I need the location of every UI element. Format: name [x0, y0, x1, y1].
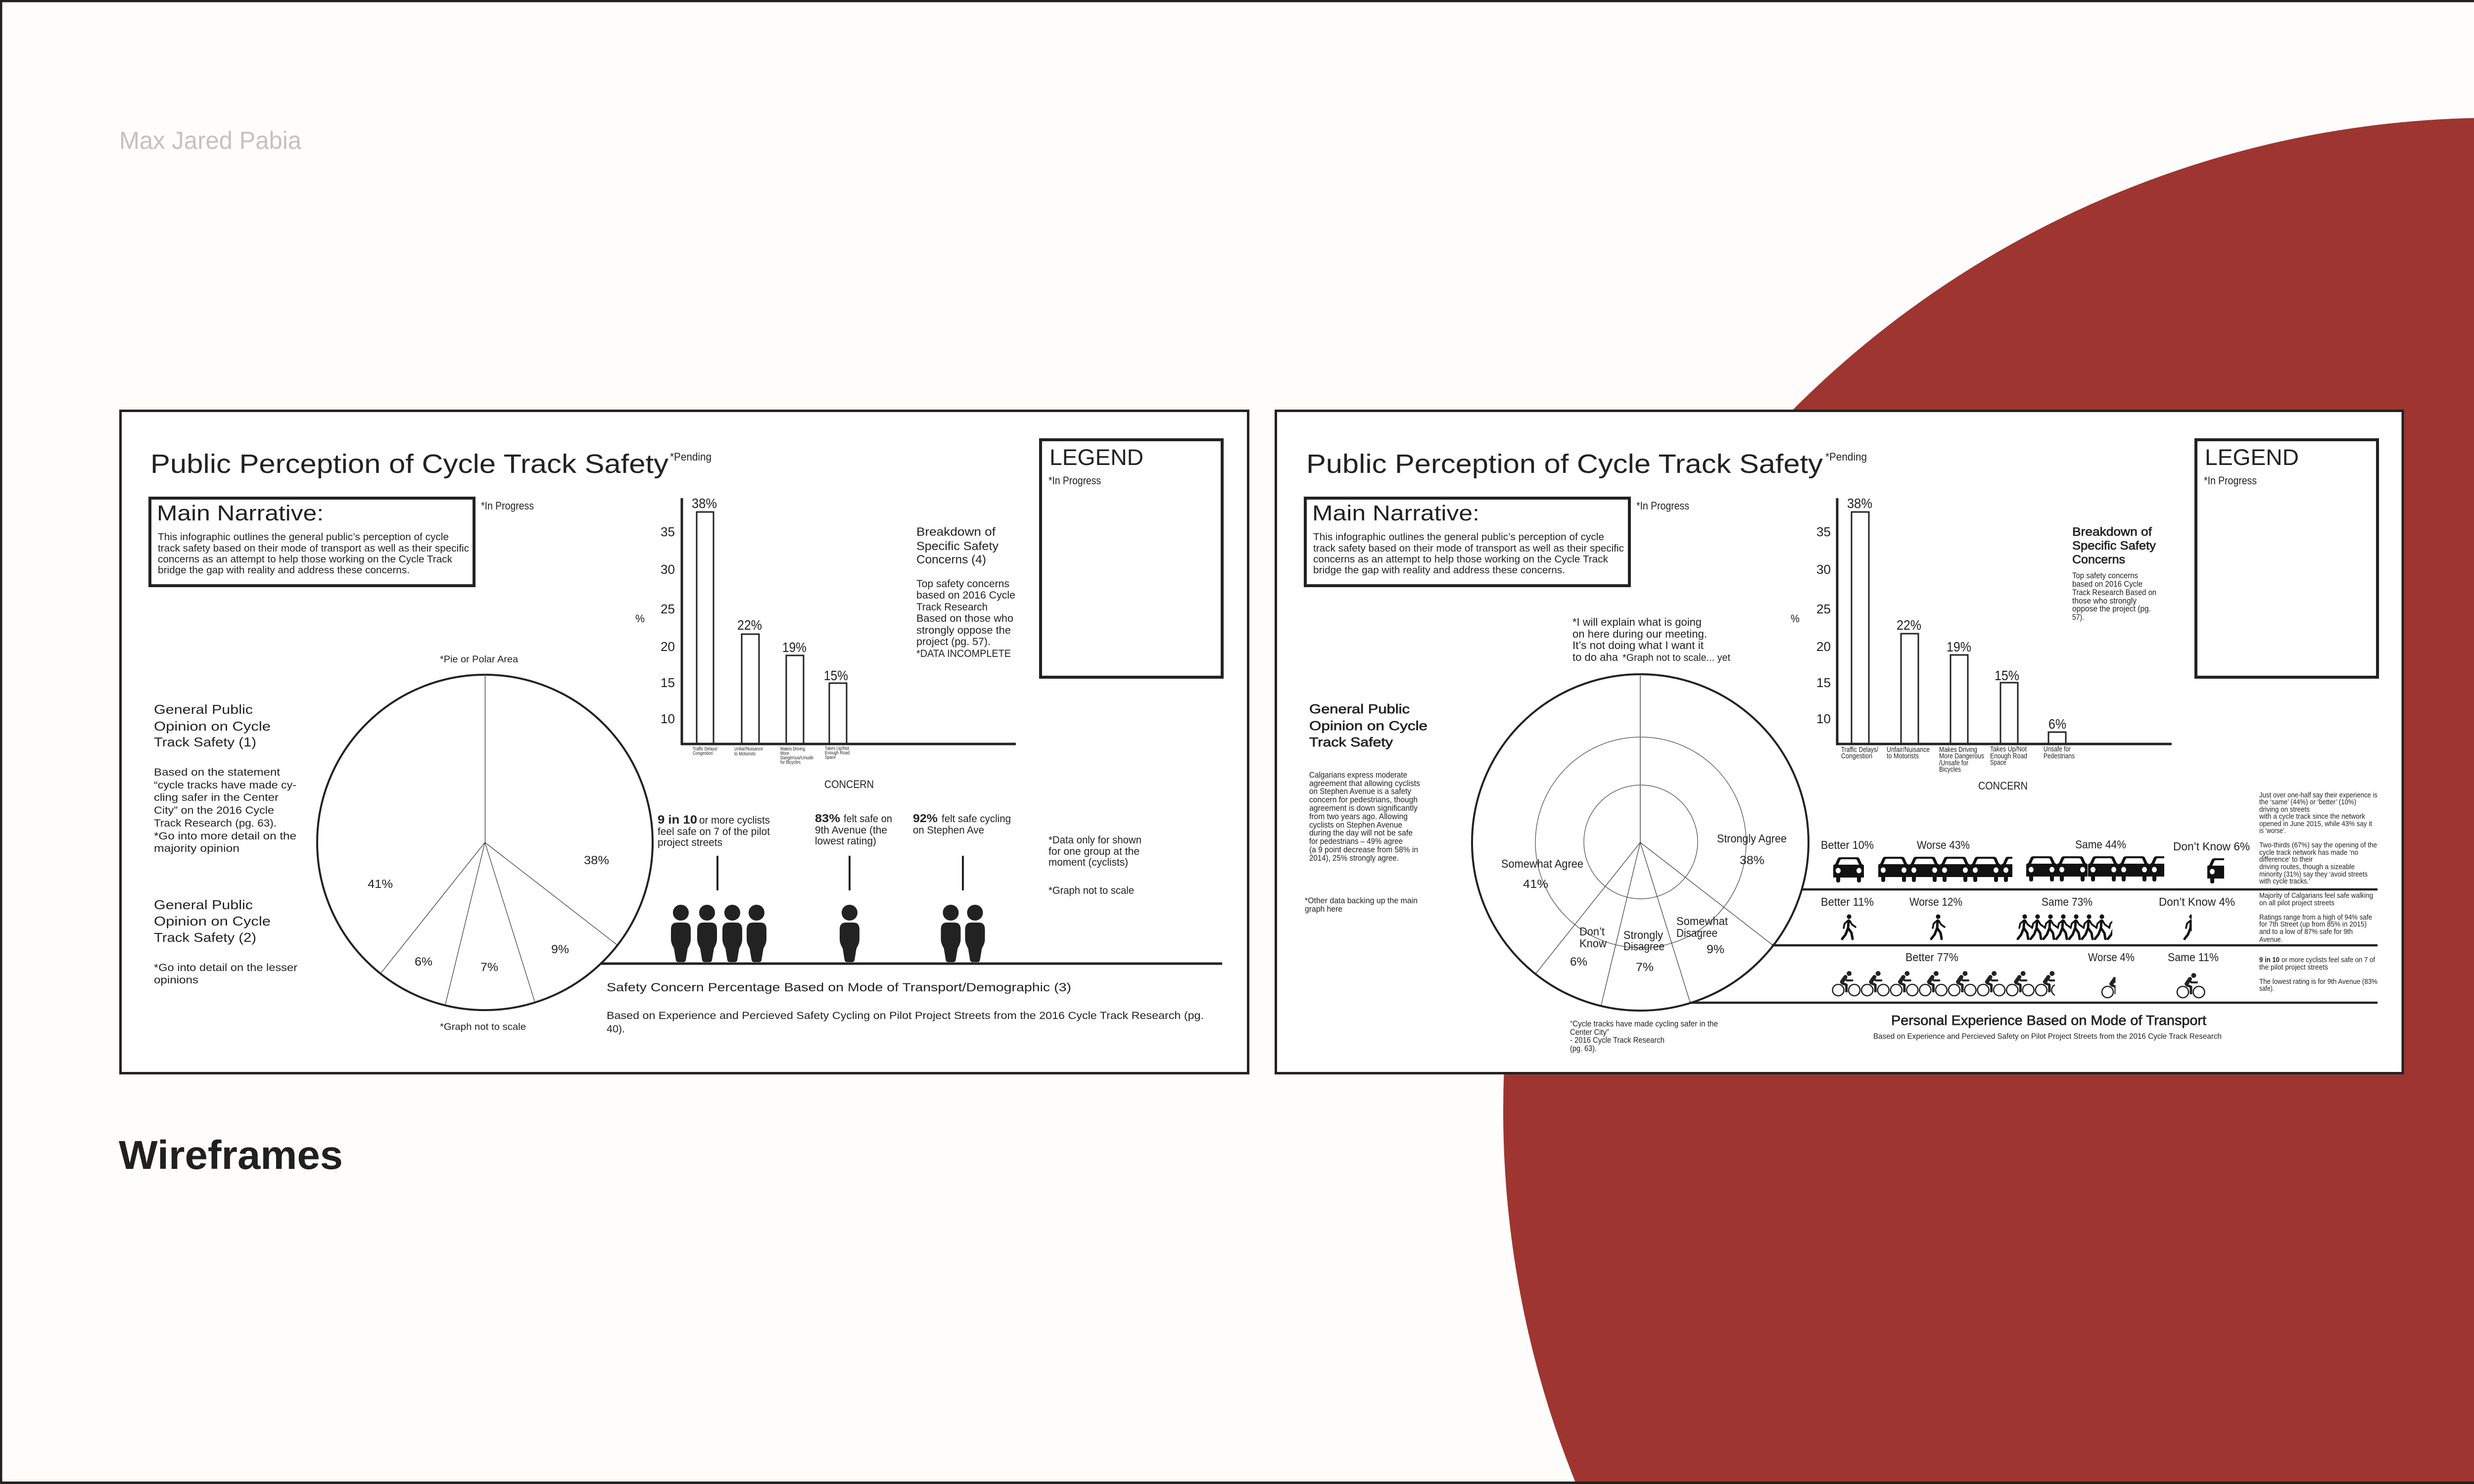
- pictogram: safety concern by mode: felt safe cycling: [942, 813, 1011, 825]
- bar chart: concerns: 35: [661, 524, 675, 539]
- bar chart: concerns: More: [780, 750, 789, 756]
- text block: general public opinion: *Other data backing up the main: [1305, 896, 1418, 905]
- legend box: LEGEND: [1049, 445, 1143, 470]
- bar chart: concerns: 20: [1816, 639, 1831, 654]
- polar area chart: Center City”: [1570, 1027, 1609, 1037]
- legend box: LEGEND: [2205, 445, 2299, 470]
- bar chart: concerns: 15: [661, 675, 675, 690]
- title: *Pending: [1825, 451, 1867, 463]
- pictogram: safety concern by mode: lowest rating): [815, 835, 876, 847]
- bar chart: concerns: 30: [661, 562, 675, 577]
- text block: side findings: The lowest rating is for 9th Avenue (83%: [2259, 977, 2378, 986]
- pictogram: safety concern by mode: 83%: [815, 812, 840, 825]
- text block: side findings: the ‘same’ (44%) or ‘better’ (10%): [2259, 798, 2356, 806]
- text block: general public opinion: *Go into detail on the lesser: [154, 962, 297, 974]
- text block: breakdown of concerns: Based on those who: [916, 613, 1013, 624]
- text block: general public opinion: cyclists on Stephen Avenue: [1309, 820, 1402, 830]
- text block: side findings: or more cyclists feel safe on 7 of: [2282, 956, 2376, 964]
- text block: general public opinion: *Go into more detail on the: [154, 831, 296, 842]
- text block: side findings: Just over one-half say their experience is: [2259, 791, 2378, 799]
- bar chart: concerns: 25: [661, 602, 675, 616]
- text block: side findings: Majority of Calgarians feel safe walking: [2259, 891, 2373, 900]
- note: in progress: *In Progress: [481, 500, 534, 512]
- polar area chart: “Cycle tracks have made cycling safer in the: [1570, 1019, 1718, 1028]
- text block: breakdown of concerns: project (pg. 57).: [916, 636, 991, 648]
- main narrative box: Main Narrative:: [1312, 501, 1479, 525]
- text block: side findings: Ratings range from a high of 94% safe: [2259, 913, 2372, 922]
- main narrative box: This infographic outlines the general public’s perception of cycle: [1313, 532, 1604, 543]
- text block: general public opinion: Track Safety (2): [154, 930, 256, 945]
- polar area chart: Know: [1579, 937, 1607, 950]
- bar chart: concerns: 20: [661, 639, 675, 654]
- text block: side findings: Avenue.: [2259, 935, 2283, 944]
- main narrative box: This infographic outlines the general public’s perception of cycle: [158, 532, 449, 543]
- row: pedestrians: Same 73%: [2042, 895, 2093, 908]
- polar area chart: 7%: [1636, 961, 1654, 974]
- text block: side findings: opened in June 2015, while 43% say it: [2259, 820, 2373, 828]
- row: cyclists: Same 11%: [2168, 951, 2219, 964]
- text block: side findings: safe).: [2259, 984, 2274, 993]
- text block: breakdown of concerns: Top safety concerns: [916, 578, 1009, 590]
- pictogram: safety concern by mode: feel safe on 7 of the pilot: [658, 826, 770, 837]
- text block: breakdown of concerns: [2072, 525, 2156, 622]
- pictogram: safety concern by mode: project streets: [658, 837, 722, 848]
- text block: side findings: 9 in 10: [2259, 956, 2280, 964]
- text block: side findings: driving routes, though a sizeable: [2259, 863, 2355, 871]
- author name: Max Jared Pabia: [119, 127, 301, 154]
- polar area chart: (pg. 63).: [1570, 1044, 1597, 1053]
- bar chart: concerns: 10: [661, 711, 675, 726]
- text block: general public opinion: Track Research (pg. 63).: [154, 818, 277, 829]
- text block: general public opinion: (a 9 point decrease from 58% in: [1309, 845, 1418, 854]
- pictogram: safety concern by mode: 9 in 10: [658, 813, 697, 827]
- text block: breakdown of concerns: based on 2016 Cycle: [2072, 579, 2142, 589]
- polar area chart: Strongly Agree: [1717, 832, 1787, 845]
- section heading: wireframes: Wireframes: [119, 1133, 343, 1178]
- row: drivers: Don’t Know 6%: [2173, 840, 2250, 853]
- polar area chart: [1472, 674, 1808, 1053]
- bar chart: concerns: 19%: [782, 640, 807, 655]
- note: explanation: *Graph not to scale... yet: [1622, 652, 1730, 663]
- pie chart: *Graph not to scale: [440, 1022, 526, 1032]
- bar chart: concerns: Pedestrians: [2044, 752, 2075, 760]
- polar area chart: Disagree: [1676, 927, 1717, 939]
- note: explanation: It’s not doing what I want it: [1572, 639, 1704, 651]
- main narrative box: concerns as an attempt to help those working on the Cycle Track: [158, 554, 453, 565]
- panel: wireframe 2: [1276, 411, 2403, 1073]
- bar chart: concerns: Enough Road: [825, 750, 850, 756]
- bar chart: concerns: 15%: [1995, 668, 2019, 683]
- text block: side findings: and to a low of 87% safe for 9th: [2259, 928, 2353, 936]
- text block: general public opinion: City” on the 2016 Cycle: [154, 805, 274, 816]
- text block: general public opinion: General Public: [1309, 701, 1410, 716]
- bar chart: concerns: Traffic Delays/: [1841, 745, 1879, 754]
- text block: breakdown of concerns: oppose the project (pg.: [2072, 604, 2151, 613]
- main narrative box: bridge the gap with reality and address these concerns.: [158, 565, 410, 576]
- polar area chart: 38%: [1740, 854, 1764, 867]
- text block: general public opinion: Opinion on Cycle: [154, 719, 271, 734]
- note: explanation: to do aha: [1572, 651, 1618, 663]
- bar chart: concerns: Dangerous/Unsafe: [780, 755, 813, 761]
- text block: side findings: the pilot project streets: [2259, 963, 2328, 972]
- polar area chart: Somewhat: [1676, 915, 1728, 928]
- text block: breakdown of concerns: Concerns (4): [916, 553, 986, 566]
- notes: data and scale: [1048, 835, 1142, 896]
- pictogram: safety concern by mode: or more cyclists: [699, 815, 770, 826]
- bar chart: concerns: 22%: [737, 617, 762, 633]
- bar chart: concerns: Traffic Delays/: [693, 746, 717, 752]
- text block: general public opinion: Track Safety: [1309, 735, 1393, 749]
- text block: general public opinion: 2014), 25% strongly agree.: [1309, 853, 1399, 863]
- bar chart: concerns: CONCERN: [824, 778, 874, 790]
- bar chart: concerns: Enough Road: [1990, 752, 2027, 760]
- bar chart: concerns: Congestion: [693, 750, 713, 756]
- text block: side findings: minority (31%) say they ‘avoid streets: [2259, 870, 2368, 879]
- text block: general public opinion: [154, 702, 297, 986]
- pictogram: safety concern by mode: felt safe on: [844, 813, 892, 825]
- bar chart: concerns: 35: [1816, 524, 1831, 539]
- text block: side findings: Two-thirds (67%) say the opening of the: [2259, 841, 2377, 849]
- text block: side findings: driving on streets: [2259, 805, 2310, 814]
- row: pedestrians: Don’t Know 4%: [2159, 895, 2235, 908]
- text block: general public opinion: on Stephen Avenue is a safety: [1309, 787, 1411, 796]
- text block: general public opinion: “cycle tracks have made cy-: [154, 780, 296, 791]
- pie chart: 6%: [415, 955, 432, 969]
- bar chart: concerns: 19%: [1947, 639, 1971, 654]
- text block: general public opinion: Track Safety (1): [154, 735, 256, 749]
- bar chart: concerns: Unfair/Nuisance: [734, 746, 763, 752]
- main narrative box: track safety based on their mode of transport as well as their specific: [1313, 543, 1624, 554]
- notes: data and scale: *Data only for shown: [1048, 835, 1142, 846]
- pictogram: safety concern by mode: Based on Experience and Percieved Safety Cycling on Pilot Project Streets from the 2016 Cycle Track Research (pg.: [607, 1010, 1204, 1021]
- bar chart: concerns: Unfair/Nuisance: [1887, 745, 1930, 754]
- pie chart: 41%: [368, 878, 393, 891]
- polar area chart: Don’t: [1579, 925, 1605, 938]
- pictogram: personal experience by mode: Personal Experience Based on Mode of Transport: [1891, 1013, 2206, 1028]
- text block: breakdown of concerns: [916, 525, 1015, 659]
- bar chart: concerns: [1791, 496, 2172, 792]
- text block: general public opinion: during the day will not be safe: [1309, 828, 1413, 837]
- bar chart: concerns: More Dangerous: [1939, 752, 1984, 760]
- pictogram: personal experience by mode: [1690, 838, 2378, 1041]
- text block: breakdown of concerns: Top safety concerns: [2072, 571, 2138, 580]
- text block: side findings: with a cycle track since the network: [2259, 812, 2365, 821]
- text block: general public opinion: General Public: [154, 897, 253, 912]
- text block: side findings: for 7th Street (up from 85% in 2015): [2259, 920, 2367, 928]
- polar area chart: 41%: [1523, 878, 1548, 891]
- panel: wireframe 1: [121, 411, 1248, 1073]
- note: explanation: [1572, 616, 1730, 663]
- text block: breakdown of concerns: Breakdown of: [916, 525, 996, 539]
- main narrative box: concerns as an attempt to help those working on the Cycle Track: [1313, 554, 1609, 565]
- text block: breakdown of concerns: Track Research: [916, 602, 988, 613]
- bar chart: concerns: /Unsafe for: [1939, 759, 1968, 767]
- main narrative box: Main Narrative:: [157, 501, 324, 525]
- bar chart: concerns: Makes Driving: [780, 746, 805, 752]
- legend box: [2196, 440, 2378, 677]
- row: drivers: Worse 43%: [1917, 838, 1970, 851]
- main narrative box: bridge the gap with reality and address these concerns.: [1313, 565, 1565, 576]
- notes: data and scale: for one group at the: [1048, 846, 1140, 857]
- pie chart: *Pie or Polar Area: [440, 654, 518, 665]
- text block: breakdown of concerns: Breakdown of: [2072, 525, 2152, 539]
- bar chart: concerns: CONCERN: [1978, 780, 2028, 792]
- bar chart: concerns: 25: [1816, 602, 1831, 616]
- pictogram: safety concern by mode: 40).: [607, 1023, 625, 1035]
- row: cyclists: Better 77%: [1905, 951, 1958, 964]
- polar area chart: 9%: [1707, 943, 1724, 956]
- bar chart: concerns: Takes Up/Not: [825, 745, 849, 751]
- bar chart: concerns: Makes Driving: [1939, 745, 1977, 754]
- title: Public Perception of Cycle Track Safety: [150, 449, 668, 479]
- text block: side findings: [2259, 791, 2378, 993]
- notes: data and scale: *Graph not to scale: [1048, 885, 1134, 896]
- note: in progress: *In Progress: [1636, 500, 1689, 512]
- main narrative box: [150, 498, 474, 586]
- bar chart: concerns: Takes Up/Not: [1990, 745, 2027, 753]
- note: explanation: *I will explain what is going: [1572, 616, 1702, 628]
- text block: general public opinion: agreement is down significantly: [1309, 803, 1418, 813]
- text block: breakdown of concerns: strongly oppose the: [916, 625, 1011, 636]
- bar chart: concerns: to Motorists: [1887, 752, 1919, 760]
- bar chart: concerns: 30: [1816, 562, 1831, 577]
- text block: side findings: on all pilot project streets: [2259, 899, 2334, 907]
- pie chart: [317, 654, 653, 1032]
- legend box: *In Progress: [2204, 474, 2257, 487]
- row: drivers: [1821, 838, 2250, 883]
- bar chart: concerns: for Bicycles: [780, 759, 801, 765]
- text block: side findings: difference’ to their: [2259, 855, 2313, 864]
- pictogram: safety concern by mode: on Stephen Ave: [913, 825, 984, 836]
- bar chart: concerns: Space: [825, 754, 836, 760]
- bar chart: concerns: [635, 496, 1016, 790]
- pictogram: safety concern by mode: 92%: [913, 812, 938, 825]
- text block: breakdown of concerns: those who strongly: [2072, 596, 2137, 605]
- bar chart: concerns: to Motorists: [734, 751, 756, 757]
- pictogram: personal experience by mode: Based on Experience and Percieved Safety on Pilot Project Streets from the 2016 Cycle Track Research: [1873, 1032, 2222, 1041]
- polar area chart: Somewhat Agree: [1501, 857, 1583, 870]
- bar chart: concerns: 15: [1816, 675, 1831, 690]
- bar chart: concerns: 15%: [824, 668, 848, 683]
- text block: general public opinion: graph here: [1305, 904, 1342, 914]
- text block: side findings: is ‘worse’.: [2259, 827, 2286, 835]
- pictogram: safety concern by mode: 9th Avenue (the: [815, 825, 887, 836]
- text block: general public opinion: for pedestrians – 49% agree: [1309, 836, 1403, 846]
- bar chart: concerns: 6%: [2048, 716, 2066, 732]
- main narrative box: [1305, 498, 1629, 586]
- bar chart: concerns: Space: [1990, 758, 2006, 767]
- note: explanation: on here during our meeting.: [1572, 628, 1707, 640]
- bar chart: concerns: Congestion: [1841, 752, 1872, 760]
- title: *Pending: [670, 451, 712, 463]
- bar chart: concerns: 38%: [1847, 496, 1872, 511]
- bar chart: concerns: 22%: [1897, 617, 1921, 633]
- pie chart: 38%: [584, 854, 609, 867]
- polar area chart: - 2016 Cycle Track Research: [1570, 1035, 1665, 1045]
- text block: breakdown of concerns: Track Research Based on: [2072, 588, 2156, 597]
- text block: general public opinion: agreement that allowing cyclists: [1309, 779, 1420, 788]
- legend box: [1041, 440, 1222, 677]
- row: pedestrians: Worse 12%: [1909, 895, 1962, 908]
- pictogram: safety concern by mode: Safety Concern Percentage Based on Mode of Transport/Demographic (3): [607, 981, 1071, 994]
- row: pedestrians: Better 11%: [1821, 895, 1874, 908]
- bar chart: concerns: %: [635, 612, 645, 625]
- polar area chart: 6%: [1570, 955, 1587, 969]
- text block: side findings: with cycle tracks.’: [2259, 877, 2310, 885]
- pictogram: safety concern by mode: [600, 812, 1222, 1035]
- text block: breakdown of concerns: 57).: [2072, 612, 2084, 622]
- pie chart: 7%: [480, 961, 498, 974]
- bar chart: concerns: Unsafe for: [2044, 745, 2071, 753]
- bar chart: concerns: 38%: [692, 496, 717, 511]
- row: cyclists: [1833, 951, 2219, 998]
- text block: breakdown of concerns: Specific Safety: [2072, 539, 2156, 553]
- title: Public Perception of Cycle Track Safety: [1306, 449, 1823, 479]
- text block: general public opinion: opinions: [154, 974, 198, 986]
- bar chart: concerns: Bicycles: [1939, 765, 1961, 774]
- text block: general public opinion: General Public: [154, 702, 253, 717]
- text block: general public opinion: [1305, 701, 1427, 914]
- text block: general public opinion: majority opinion: [154, 843, 239, 854]
- decorative red circle: [1503, 118, 2474, 1484]
- text block: breakdown of concerns: Specific Safety: [916, 540, 999, 553]
- text block: general public opinion: Calgarians express moderate: [1309, 770, 1407, 780]
- text block: general public opinion: from two years ago. Allowing: [1309, 812, 1408, 821]
- polar area chart: Strongly: [1623, 928, 1663, 941]
- bar chart: concerns: 10: [1816, 711, 1831, 726]
- pie chart: 9%: [551, 943, 569, 956]
- text block: general public opinion: Based on the statement: [154, 767, 280, 778]
- text block: breakdown of concerns: based on 2016 Cycle: [916, 590, 1015, 601]
- text block: general public opinion: cling safer in the Center: [154, 792, 279, 803]
- row: pedestrians: [1821, 895, 2235, 939]
- text block: breakdown of concerns: *DATA INCOMPLETE: [916, 648, 1011, 659]
- text block: general public opinion: Opinion on Cycle: [154, 914, 271, 928]
- row: cyclists: Worse 4%: [2088, 951, 2135, 964]
- row: drivers: Same 44%: [2075, 838, 2126, 851]
- text block: breakdown of concerns: Concerns: [2072, 553, 2125, 566]
- text block: general public opinion: concern for pedestrians, though: [1309, 795, 1418, 804]
- notes: data and scale: moment (cyclists): [1048, 857, 1128, 868]
- main narrative box: track safety based on their mode of transport as well as their specific: [158, 543, 469, 554]
- polar area chart: Disagree: [1623, 940, 1665, 953]
- text block: general public opinion: Opinion on Cycle: [1309, 718, 1427, 733]
- legend box: *In Progress: [1048, 474, 1101, 487]
- row: drivers: Better 10%: [1821, 838, 1874, 851]
- bar chart: concerns: %: [1791, 612, 1800, 625]
- text block: side findings: cycle track network has made ‘no: [2259, 848, 2358, 857]
